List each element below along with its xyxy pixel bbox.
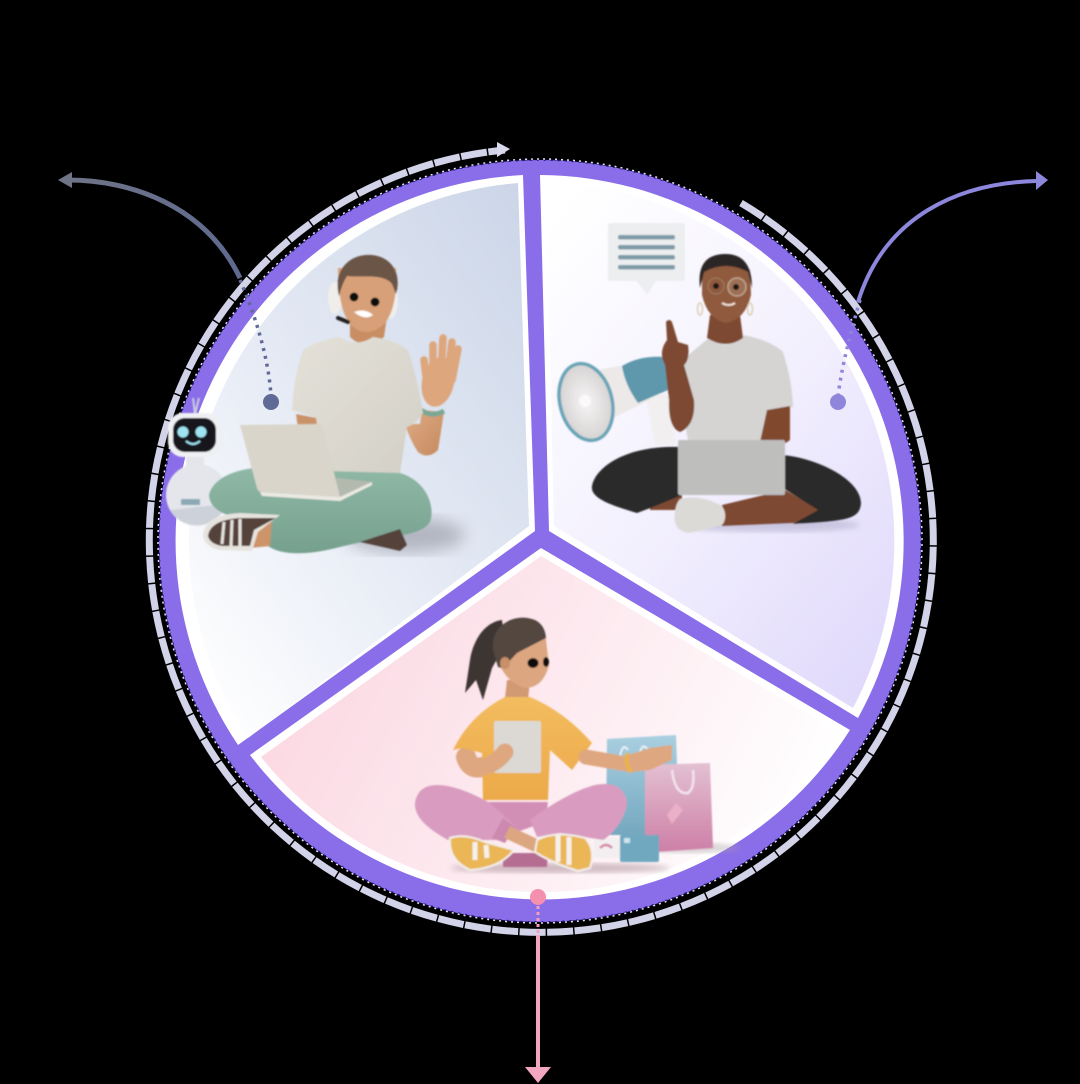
figure: marketer with megaphone: [551, 223, 861, 533]
icon: robot: [166, 398, 228, 526]
sub: shoe: [675, 498, 725, 533]
sub: credit card: [620, 835, 659, 862]
sub: head: [328, 255, 398, 332]
figure: support agent with laptop: [203, 255, 465, 553]
sub: arms: [482, 745, 672, 772]
sub: laptop: [240, 424, 372, 501]
sub: shirt: [453, 697, 592, 800]
figure: shopper with tablet and bags: [415, 618, 740, 873]
dotted connector: left: [240, 280, 279, 410]
sub: head: [698, 254, 752, 344]
sub: left upper arm: [466, 757, 482, 768]
sub: right arm: [760, 406, 790, 446]
panel: left segment: [176, 175, 535, 745]
sub: raised arm: [662, 320, 694, 432]
sub: t-shirt: [680, 335, 793, 450]
sub: waving arm: [405, 338, 459, 456]
sub: t-shirt: [292, 337, 423, 477]
connector arrow: upper right: [858, 171, 1048, 302]
panel: right segment: [540, 175, 904, 718]
dotted connector: right: [830, 300, 860, 410]
sub: pink shopping bag: [645, 763, 713, 852]
sub: receipt: [594, 838, 622, 858]
disc noisy edge: [158, 159, 922, 923]
sub: trousers: [592, 447, 861, 524]
sub: trousers: [209, 467, 432, 553]
outer pale ring with top arrow: [149, 142, 933, 932]
sub: ponytail: [465, 620, 505, 700]
sub: ankles: [507, 832, 537, 846]
panel: bottom segment: [250, 548, 850, 899]
connector arrow: bottom: [525, 889, 551, 1083]
sub: trousers: [415, 784, 627, 867]
sub: laptop: [678, 440, 785, 495]
main purple disc: [159, 160, 921, 922]
sub: speech bubble: [608, 223, 685, 295]
sub: shoes: [450, 834, 592, 871]
sub: head: [493, 618, 549, 702]
sub: left shoe: [203, 513, 280, 551]
sub: tablet: [494, 721, 541, 773]
connector arrow: upper left: [58, 172, 240, 278]
sub: legs: [650, 490, 820, 526]
sub: right shoe: [360, 529, 407, 551]
sub: megaphone: [551, 357, 675, 446]
sub: blue shopping bag: [606, 735, 677, 835]
